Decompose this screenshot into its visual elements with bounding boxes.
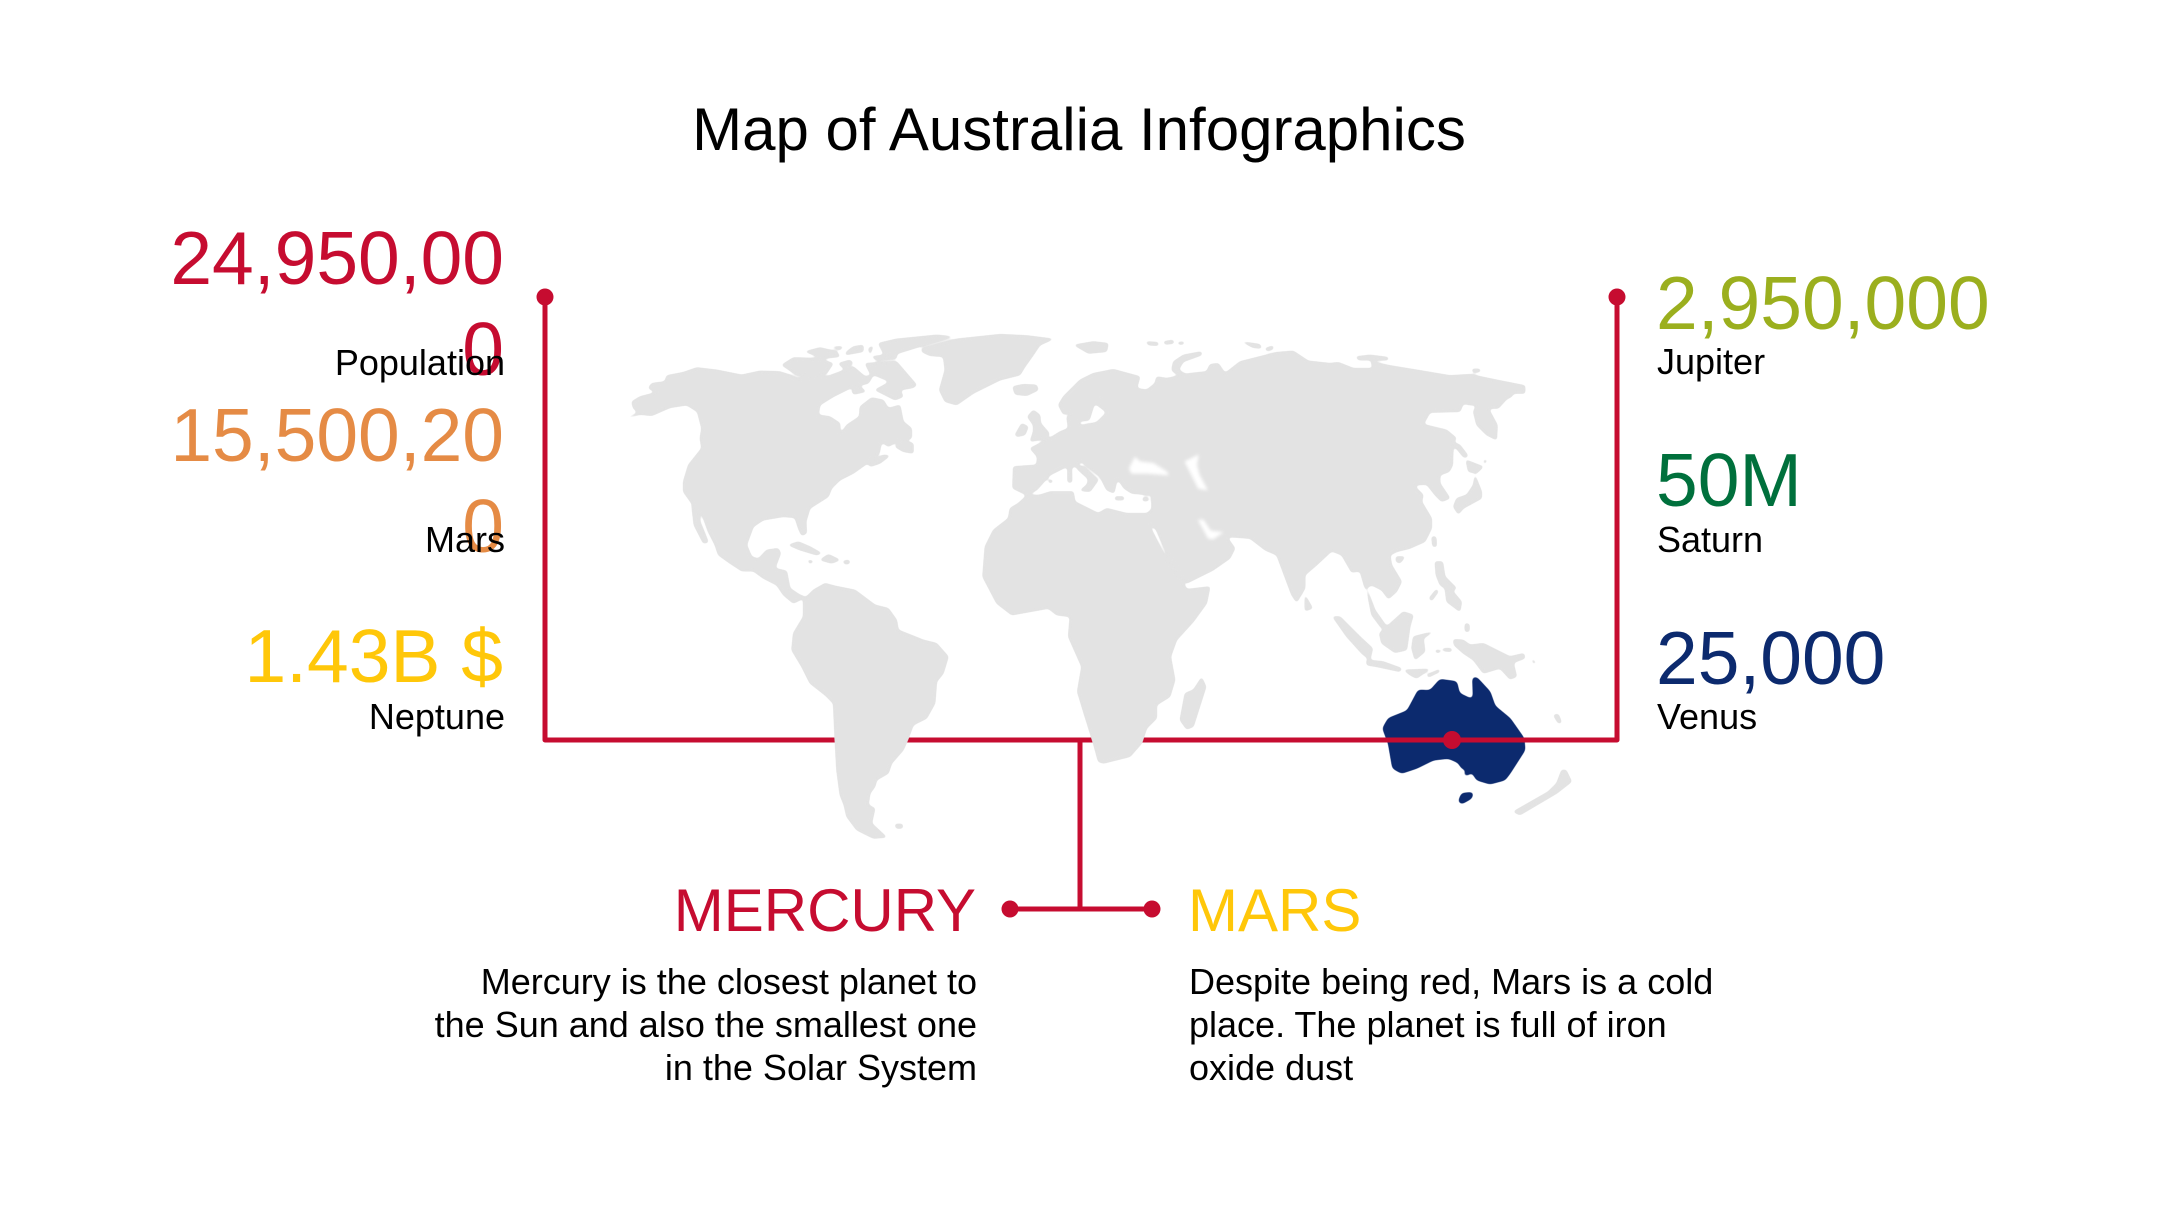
stat: population: Population [335, 342, 505, 383]
stat: neptune [244, 614, 505, 737]
eurasia [1013, 340, 1525, 602]
stat: venus: 25,000 [1656, 616, 1885, 700]
stat: jupiter [1656, 261, 1990, 382]
callout: mercury: Mercury is the closest planet to [481, 961, 977, 1002]
callout: mercury: MERCURY [674, 877, 976, 944]
callout: mercury: the Sun and also the smallest one [435, 1004, 977, 1045]
stat: jupiter: Jupiter [1657, 341, 1765, 382]
australia highlight [1383, 677, 1525, 804]
north america and arctic islands [626, 334, 1053, 603]
callout: mercury: in the Solar System [665, 1047, 977, 1088]
stat: population [170, 216, 505, 391]
australia location dot [1443, 731, 1461, 749]
indonesia and new guinea [1333, 612, 1536, 679]
east asia and philippines islands [1305, 355, 1487, 628]
connector line across australia [1384, 738, 1526, 742]
stat: neptune: 1.43B $ [244, 614, 503, 698]
callout: mars: Despite being red, Mars is a cold [1189, 961, 1713, 1002]
title: Map of Australia Infographics [692, 96, 1466, 163]
callout: mars: oxide dust [1189, 1047, 1353, 1088]
stat: mars [170, 393, 505, 568]
stat: jupiter: 2,950,000 [1656, 261, 1990, 345]
callout: mercury [435, 877, 977, 1088]
stat: saturn: 50M [1656, 438, 1802, 522]
stat: population: 0 [462, 307, 504, 391]
stat: mars: 0 [462, 484, 504, 568]
new zealand and new caledonia [1513, 714, 1572, 815]
stat: saturn [1656, 438, 1802, 560]
africa and madagascar [983, 492, 1210, 763]
callout: mars [1188, 877, 1713, 1088]
stat: venus [1656, 616, 1885, 737]
stat: population: 24,950,00 [170, 216, 504, 300]
stat: neptune: Neptune [369, 696, 505, 737]
stat: mars: 15,500,20 [170, 393, 504, 477]
stat: mars: Mars [425, 519, 505, 560]
stat: saturn: Saturn [1657, 519, 1763, 560]
south america [792, 583, 948, 838]
connector end dots [536, 288, 1626, 918]
callout: mars: place. The planet is full of iron [1189, 1004, 1667, 1045]
world map [626, 334, 1572, 838]
callout: mars: MARS [1188, 877, 1361, 944]
connector lines [545, 297, 1617, 909]
stat: venus: Venus [1657, 696, 1757, 737]
